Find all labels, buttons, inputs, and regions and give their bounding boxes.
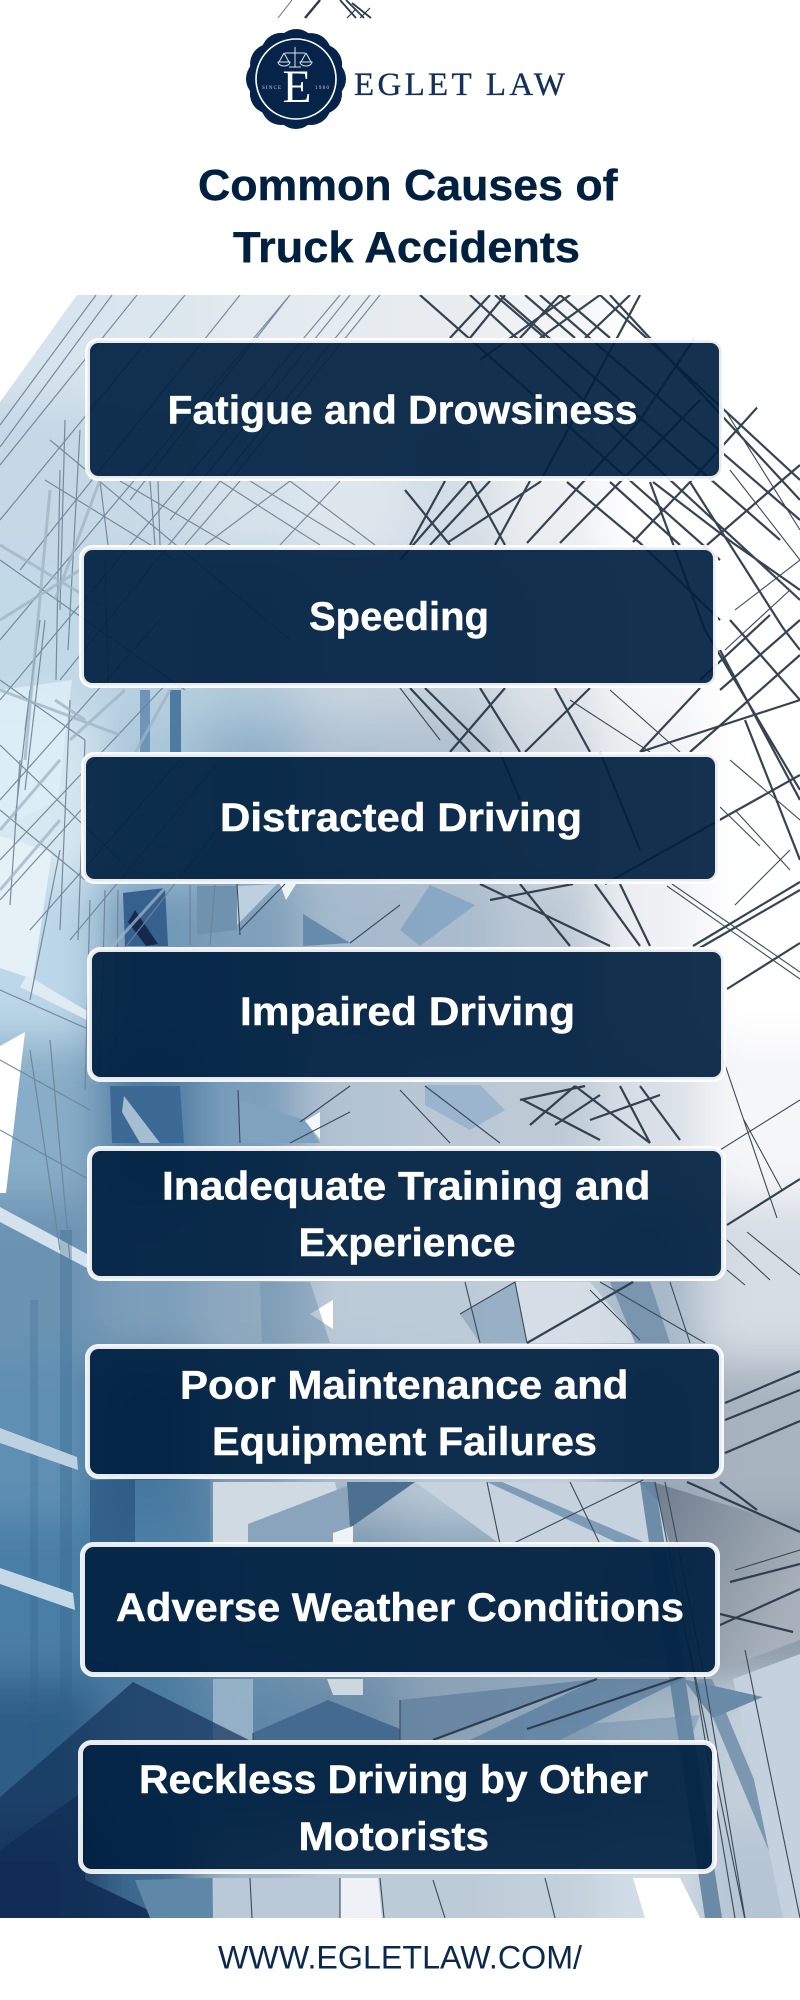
logo: Eglet Law seal and wordmark xyxy=(248,32,566,126)
panel: Adverse Weather Conditions xyxy=(82,1544,718,1674)
seal: SINCE xyxy=(262,86,281,91)
title: Common Causes of xyxy=(198,161,618,210)
panel: Inadequate Training and Experience: Inadequate Training and xyxy=(162,1164,650,1208)
panel: Poor Maintenance and Equipment Failures xyxy=(88,1346,722,1476)
panel: Poor Maintenance and Equipment Failures: Poor Maintenance and xyxy=(180,1364,628,1408)
panel: Speeding: Speeding xyxy=(309,595,489,639)
panel: Impaired Driving xyxy=(90,950,724,1080)
panel: Speeding xyxy=(82,548,716,686)
top background sliver xyxy=(278,0,371,18)
title xyxy=(198,161,618,272)
panel: Poor Maintenance and Equipment Failures: Equipment Failures xyxy=(212,1420,597,1464)
panel: Reckless Driving by Other Motorists: Motorists xyxy=(298,1815,489,1859)
seal: E xyxy=(282,61,312,113)
title: Truck Accidents xyxy=(233,223,580,272)
panel: Impaired Driving: Impaired Driving xyxy=(240,990,575,1034)
panel: Fatigue and Drowsiness xyxy=(88,340,722,478)
panel: Adverse Weather Conditions: Adverse Weather Conditions xyxy=(116,1586,684,1630)
panel: Fatigue and Drowsiness: Fatigue and Drowsiness xyxy=(168,388,638,432)
dark wire frame, centre and right xyxy=(400,295,800,1740)
glass panes xyxy=(0,680,800,1918)
wordmark: EGLET LAW xyxy=(354,67,566,103)
panel: Inadequate Training and Experience: Experience xyxy=(298,1221,516,1265)
footer website address: WWW.EGLETLAW.COM/ xyxy=(218,1940,582,1976)
panel: Inadequate Training and Experience xyxy=(90,1148,724,1278)
panel: Distracted Driving: Distracted Driving xyxy=(220,796,582,840)
seal xyxy=(248,32,344,126)
seal: 1980 xyxy=(315,86,330,91)
panel: Reckless Driving by Other Motorists xyxy=(80,1742,714,1872)
panel: Reckless Driving by Other Motorists: Reckless Driving by Other xyxy=(139,1758,648,1802)
light grey wire frame, left side xyxy=(0,295,380,1260)
panel: Distracted Driving xyxy=(84,754,718,882)
